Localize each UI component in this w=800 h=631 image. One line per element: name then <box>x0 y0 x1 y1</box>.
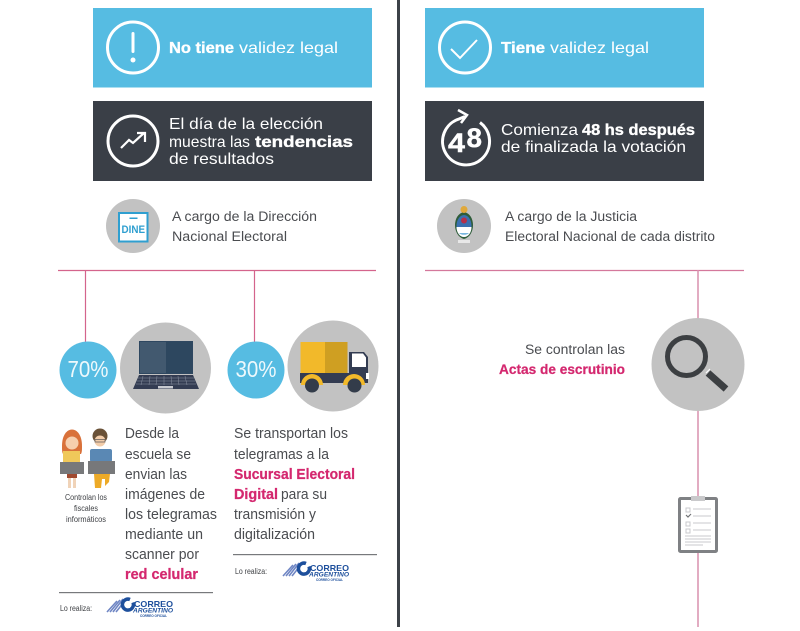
text: desde la escuela: envian las <box>125 467 187 483</box>
credit: lo realiza, right: Lo realiza: <box>235 567 267 576</box>
logo: correo argentino: CORREO OFICIAL <box>316 577 343 582</box>
icon: fiscales informáticos <box>60 428 115 524</box>
rule: left credit <box>59 592 213 593</box>
panel: no legal validity <box>93 8 372 88</box>
central divider <box>397 0 400 627</box>
logo: correo argentino: CORREO OFICIAL <box>140 613 167 618</box>
icon: DINE <box>106 199 160 253</box>
right column <box>425 8 744 627</box>
text: se controlan actas: Se controlan las <box>525 342 625 357</box>
text: desde la escuela: Desde la <box>125 426 180 442</box>
heading: tiene validez legal: Tiene validez legal <box>501 40 649 57</box>
badge: 70%: 70% <box>68 356 108 382</box>
logo: correo argentino <box>283 563 349 582</box>
icon: DINE: DINE <box>122 224 145 236</box>
badge: 70% <box>60 342 116 398</box>
panel: trends <box>93 101 372 181</box>
pink vertical line <box>697 270 699 627</box>
text: se transportan: Digital <box>234 487 278 503</box>
figure: woman <box>60 430 84 488</box>
logo: correo argentino: CORREO <box>134 599 173 609</box>
text: trends description: de resultados <box>169 151 274 168</box>
text: trends description: muestra las <box>169 134 250 151</box>
caption: controlan los fiscales informáticos: fiscales <box>74 504 98 513</box>
icon: trend arrow <box>108 116 158 166</box>
text: 48 hs description: 48 hs después <box>582 122 695 139</box>
badge: 30% <box>228 342 284 398</box>
text: 48 hs description: de finalizada la votación <box>501 139 686 156</box>
heading: no tiene validez legal: No tiene validez legal <box>169 40 338 57</box>
text: se transportan: transmisión y <box>234 507 317 523</box>
text: se transportan: Se transportan los <box>234 426 348 442</box>
text: se transportan: telegramas a la <box>234 447 330 463</box>
text: desde la escuela: escuela se <box>125 447 191 463</box>
pink connector lines <box>58 270 376 342</box>
text: se controlan actas: Actas de escrutinio <box>499 362 625 377</box>
logo: correo argentino <box>107 599 173 618</box>
text: justicia electoral: Electoral Nacional de cada distrito <box>505 229 715 244</box>
figure: man <box>88 428 115 488</box>
credit: lo realiza, left <box>60 599 173 618</box>
caption: controlan los fiscales informáticos: Controlan los <box>65 493 107 502</box>
icon: 48 clockwise arrow <box>443 110 490 165</box>
logo: correo argentino: CORREO <box>310 563 349 573</box>
text: justicia electoral: A cargo de la Justicia <box>505 209 638 224</box>
pink connector lines <box>425 270 744 272</box>
text: desde la escuela: red celular <box>125 567 198 583</box>
text: desde la escuela: imágenes de <box>125 487 205 503</box>
text: 48 hs description: Comienza <box>501 122 578 139</box>
badge: 30%: 30% <box>236 356 276 382</box>
caption: controlan los fiscales informáticos: informáticos <box>66 515 106 524</box>
text: se transportan: Sucursal Electoral <box>234 467 355 483</box>
logo: correo argentino: ARGENTINO <box>308 572 349 578</box>
text: desde la escuela: los telegramas <box>125 507 217 523</box>
icon: magnifying glass <box>652 318 744 411</box>
text: se transportan: digitalización <box>234 527 315 543</box>
icon: check <box>440 22 490 73</box>
credit: lo realiza, left: Lo realiza: <box>60 604 92 613</box>
text: trends description: tendencias <box>255 134 353 151</box>
text: trends description: El día de la elección <box>169 116 323 133</box>
text: se transportan: para su <box>281 487 327 503</box>
rule: right credit <box>233 554 377 555</box>
credit: lo realiza, right <box>235 563 349 582</box>
icon: laptop <box>120 322 211 414</box>
text: desde la escuela: mediante un <box>125 527 203 543</box>
icon: national coat of arms <box>437 199 491 253</box>
logo: correo argentino: ARGENTINO <box>132 608 173 614</box>
icon: 48 clockwise arrow: 8 <box>466 123 482 153</box>
icon: truck <box>288 320 378 412</box>
icon: 48 clockwise arrow: 4 <box>448 128 465 158</box>
text: dirección nacional electoral: A cargo de la Dirección <box>172 209 317 224</box>
left column <box>58 8 378 618</box>
panel: 48 hours <box>425 101 704 181</box>
panel: has legal validity <box>425 8 704 88</box>
icon: exclamation <box>108 22 158 73</box>
icon: clipboard <box>680 496 716 552</box>
text: dirección nacional electoral: Nacional Electoral <box>172 229 287 244</box>
text: desde la escuela: scanner por <box>125 547 199 563</box>
